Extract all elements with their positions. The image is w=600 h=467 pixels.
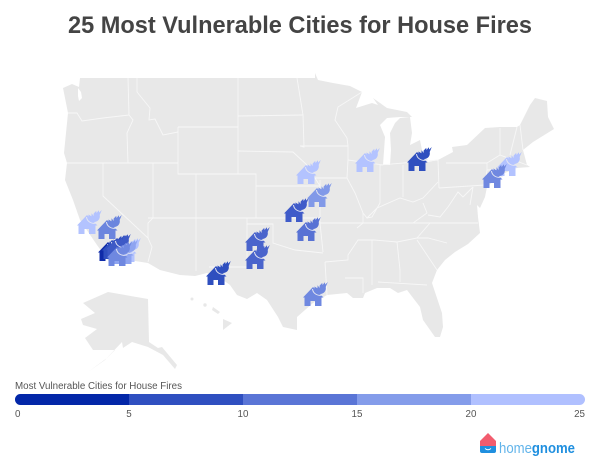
icon: house fire Southern California 6 [107,242,132,266]
icon: house fire El Paso [206,261,231,285]
title: 25 Most Vulnerable Cities for House Fires [68,12,532,39]
contiguous states landmass [63,73,554,337]
logo wordmark: homegnome [499,441,575,457]
icon: house fire Chicago [355,148,380,172]
icon: house fire Amarillo [245,227,270,251]
icon: house fire Houston [303,282,328,306]
icon: house fire New England [497,152,522,176]
logo: homegnome [480,433,575,457]
legend scale labels: 25 [574,409,586,420]
icon: house fire Wichita [284,198,309,222]
puget sound notch [78,88,82,101]
legend title: Most Vulnerable Cities for House Fires [15,381,182,392]
map of the United States [63,73,554,372]
icon: house fire Southern California 4 [116,238,141,262]
state borders [67,78,527,295]
alaska [81,292,177,372]
icon: house fire Oklahoma [296,217,321,241]
legend scale labels [15,409,586,420]
icon: house fire central California [97,215,122,239]
legend scale labels: 20 [466,409,477,420]
legend [15,381,586,420]
legend scale labels: 15 [352,409,363,420]
icon: logo house [480,433,496,453]
city house-fire icons [77,147,522,306]
icon: house fire Kansas City [307,183,332,207]
icon: house fire New York [482,164,507,188]
icon: house fire central California light [77,210,102,234]
icon: house fire Southern California 3 [106,234,131,258]
legend colour bar [15,394,585,405]
legend scale labels: 5 [126,409,132,420]
legend scale labels: 0 [15,409,21,420]
icon: house fire Los Angeles area [98,237,123,261]
icon: house fire Michigan [407,147,432,171]
legend scale labels: 10 [238,409,249,420]
icon: house fire Omaha [296,160,321,184]
icon: house fire Southern California 2 [102,235,127,259]
icon: house fire Southern California 5 [113,240,138,264]
icon: house fire Lubbock [245,245,270,269]
hawaii [190,298,232,330]
